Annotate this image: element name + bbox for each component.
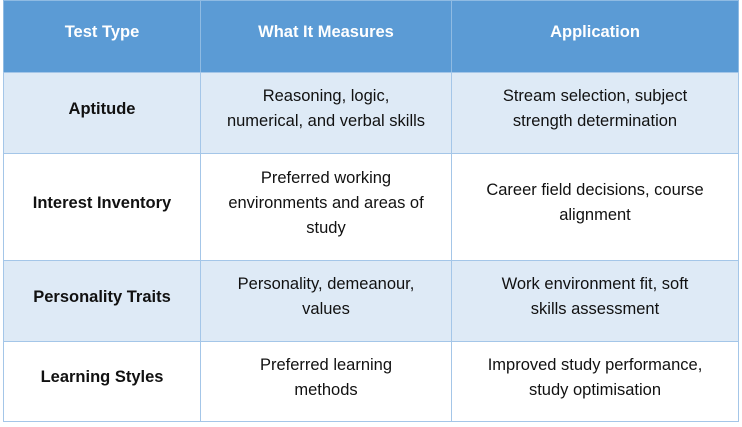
- row: Interest Inventory: [3, 154, 739, 260]
- row: Learning Styles: [3, 342, 739, 422]
- header row: What It Measures: [258, 23, 394, 41]
- row: Interest Inventory: Preferred working: [261, 168, 391, 186]
- row: Interest Inventory: study: [306, 218, 346, 236]
- header row: [3, 0, 739, 72]
- row: Learning Styles: study optimisation: [529, 380, 661, 398]
- row: Personality Traits: Work environment fit, soft: [502, 275, 688, 293]
- row: Aptitude: Stream selection, subject: [503, 87, 687, 105]
- row: Aptitude: Aptitude: [69, 100, 135, 118]
- header row: Application: [550, 23, 640, 41]
- row: Aptitude: [3, 72, 739, 153]
- row: Interest Inventory: Career field decisions, course: [486, 181, 704, 199]
- row: Aptitude: numerical, and verbal skills: [227, 112, 425, 130]
- row: Learning Styles: methods: [294, 380, 358, 398]
- row: Interest Inventory: environments and areas of: [228, 194, 424, 212]
- row: Interest Inventory: alignment: [559, 206, 631, 224]
- row: Personality Traits: Personality, demeanour,: [238, 275, 414, 293]
- row: Aptitude: strength determination: [513, 112, 677, 130]
- header row: Test Type: [65, 23, 139, 41]
- row: Personality Traits: values: [302, 300, 350, 318]
- row: Personality Traits: [3, 261, 739, 341]
- row: Learning Styles: Preferred learning: [260, 356, 392, 374]
- row: Personality Traits: skills assessment: [531, 300, 659, 318]
- row: Aptitude: Reasoning, logic,: [263, 87, 389, 105]
- row: Learning Styles: Improved study performance,: [488, 356, 702, 374]
- row: Personality Traits: Personality Traits: [33, 288, 171, 306]
- row: Learning Styles: Learning Styles: [41, 368, 163, 386]
- row: Interest Inventory: Interest Inventory: [33, 194, 171, 212]
